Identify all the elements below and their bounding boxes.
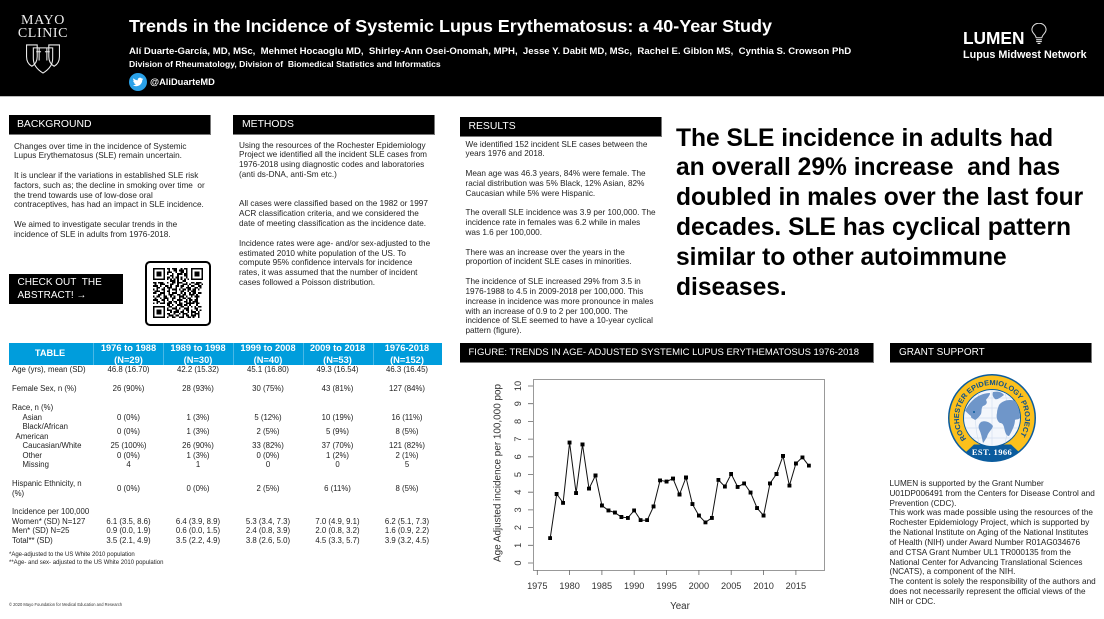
row: Black/African American — [16, 422, 418, 441]
x axis: 1985 — [592, 581, 612, 591]
x axis: 2015 — [786, 581, 806, 591]
results text: The incidence of SLE increased 29% from 3.5 in — [466, 277, 641, 286]
table footnotes: **Age- and sex- adjusted to the US White 2010 population — [9, 560, 163, 566]
header: 1999 to 2008 — [240, 343, 296, 365]
heading: results: RESULTS — [468, 121, 516, 132]
panel: results — [460, 117, 662, 335]
row: age: 46.3 (16.45) — [386, 365, 428, 374]
x axis: 1980 — [559, 581, 580, 591]
x axis: 2005 — [721, 581, 741, 591]
row: Hispanic ethnicity: Hispanic Ethnicity, n — [12, 479, 82, 488]
row: Caucasian/White: 26 (90%) — [182, 441, 214, 450]
y axis: 6 — [513, 454, 523, 459]
row: missing — [22, 460, 409, 469]
results text: incidence rate in females was 6.2 while in males — [466, 218, 640, 227]
header: 1989 to 1998: 1989 to 1998 — [170, 343, 226, 353]
logo wordmark — [18, 13, 68, 41]
background text: Changes over time in the incidence of Systemic — [14, 142, 186, 150]
row: Asian: 1 (3%) — [187, 413, 209, 422]
row: women: 7.0 (4.9, 9.1) — [315, 517, 360, 526]
row: men: 1.6 (0.9, 2.2) — [385, 526, 429, 535]
row: Black/African American: 0 (0%) — [117, 427, 140, 436]
row: other: 0 (0%) — [257, 451, 279, 460]
grant text: LUMEN is supported by the Grant Number — [890, 479, 1044, 488]
results text: pattern (figure). — [466, 326, 521, 335]
header: table: TABLE — [35, 348, 65, 358]
row: missing: 4 — [126, 460, 131, 469]
row: total: Total** (SD) — [12, 536, 53, 545]
row: age — [12, 365, 428, 374]
row: female sex: 26 (90%) — [113, 384, 144, 393]
table header — [9, 343, 442, 365]
grant text: the National Institute on Aging of the National Institutes — [890, 528, 1088, 537]
row: total: 3.8 (2.6, 5.0) — [246, 536, 290, 545]
background text: the trend towards use of low-dose oral — [14, 191, 153, 200]
row: Hispanic ethnicity: (%) — [12, 489, 24, 498]
grant text: The content is solely the responsibility of the authors and — [890, 577, 1096, 586]
globe — [963, 389, 1021, 447]
row: Caucasian/White: 33 (82%) — [252, 441, 284, 450]
row: other: 1 (3%) — [187, 451, 209, 460]
location dot — [973, 411, 975, 413]
LUMEN subtitle: Lupus Midwest Network — [963, 49, 1087, 61]
grant text: and CTSA Grant Number UL1 TR000135 from the — [890, 548, 1071, 557]
background text: factors, such as; the decline in smoking over time or — [14, 181, 205, 190]
heading: grant support: GRANT SUPPORT — [899, 347, 985, 358]
results text: was 1.6 per 100,000. — [466, 228, 542, 237]
row: women: 5.3 (3.4, 7.3) — [246, 517, 290, 526]
methods text: Incidence rates were age- and/or sex-adjusted to the — [239, 239, 430, 248]
panel: background — [9, 115, 211, 239]
row: missing: 5 — [405, 460, 409, 469]
row: Black/African American: 2 (5%) — [257, 427, 279, 436]
copyright: © 2020 Mayo Foundation for Medical Education and Research — [9, 602, 122, 607]
grant text: National Center for Advancing Translational Sciences — [890, 558, 1082, 567]
grant text: U01DP006491 from the Centers for Disease Control and — [890, 489, 1095, 498]
results text: with an increase of 0.9 to 2 per 100,000. The — [466, 307, 628, 316]
row: Asian: 5 (12%) — [254, 413, 282, 422]
row: other — [22, 451, 418, 460]
panel: table — [9, 343, 442, 545]
row: women — [12, 517, 429, 526]
row: other: 1 (2%) — [326, 451, 349, 460]
QR code — [145, 261, 211, 326]
row: Black/African American: American — [16, 432, 48, 441]
row: missing: 0 — [266, 460, 270, 469]
row: Asian: 16 (11%) — [391, 413, 423, 422]
y axis: 9 — [513, 401, 523, 406]
header: 1976-2018: (N=152) — [390, 355, 424, 365]
row: men: 0.9 (0.0, 1.9) — [106, 526, 151, 535]
icon: light bulb — [1031, 23, 1047, 44]
y axis: 2 — [513, 525, 523, 530]
heading: grant support — [890, 343, 1092, 363]
results text: Mean age was 46.3 years, 84% were female. The — [466, 169, 646, 178]
y axis title: Age Adjusted incidence per 100,000 pop — [492, 383, 504, 562]
methods text: ACR classification criteria, and we considered the — [239, 209, 419, 218]
x axis — [527, 570, 806, 591]
logo: Mayo Clinic — [18, 13, 68, 74]
row: men — [12, 526, 429, 535]
grant text — [890, 479, 1096, 606]
ring text path — [959, 385, 1025, 439]
grant text: of Health (NIH) under Award Number R01AG034676 — [890, 538, 1080, 547]
row: total: 3.9 (3.2, 4.5) — [385, 536, 429, 545]
header: 1976-2018 — [385, 343, 429, 365]
logo wordmark: MAYO — [21, 13, 65, 28]
icon: three shields — [26, 44, 60, 74]
table footnotes — [9, 552, 164, 566]
background text: It is unclear if the variations in established SLE risk — [14, 171, 198, 180]
key message — [676, 124, 1083, 301]
row: other: 0 (0%) — [117, 451, 140, 460]
row: men: 0.6 (0.0, 1.5) — [176, 526, 220, 535]
row: men: Men* (SD) N=25 — [12, 526, 69, 535]
row: missing: Missing — [22, 460, 49, 469]
globe grid — [964, 390, 1020, 446]
table footnotes: *Age-adjusted to the US White 2010 population — [9, 552, 135, 558]
row: Caucasian/White: 25 (100%) — [111, 441, 146, 450]
results text: years 1976 and 2018. — [466, 149, 545, 158]
y axis: 1 — [513, 543, 523, 548]
row: men: 2.0 (0.8, 3.2) — [315, 526, 360, 535]
results text: Caucasian while 5% were Hispanic. — [466, 189, 595, 198]
grant text: Rochester Epidemiology Project, which is supported by — [890, 518, 1089, 527]
background text — [14, 142, 205, 239]
row: total — [12, 536, 429, 545]
row: age: 42.2 (15.32) — [177, 365, 219, 374]
header: 1999 to 2008: 1999 to 2008 — [240, 343, 296, 353]
methods text: cases followed a Poisson distribution. — [239, 278, 375, 287]
row: Black/African American: 5 (9%) — [326, 427, 349, 436]
plot frame — [534, 380, 824, 570]
row: Black/African American: 1 (3%) — [187, 427, 209, 436]
row: age: 46.8 (16.70) — [107, 365, 150, 374]
panel: methods — [233, 115, 435, 287]
row: Asian: 0 (0%) — [117, 413, 140, 422]
x axis: 2000 — [689, 581, 709, 591]
heading: methods — [233, 115, 435, 135]
header: 1989 to 1998: (N=30) — [184, 355, 212, 365]
methods text: date of meeting classification as the incidence date. — [239, 219, 426, 228]
row: age: 45.1 (16.80) — [247, 365, 289, 374]
row: female sex: Female Sex, n (%) — [12, 384, 77, 393]
methods text: Using the resources of the Rochester Epidemiology — [239, 140, 426, 150]
methods text: All cases were classified based on the 1982 or 1997 — [239, 199, 428, 208]
row: age: 49.3 (16.54) — [316, 365, 359, 374]
ring — [948, 374, 1036, 462]
row: Hispanic ethnicity: 0 (0%) — [187, 484, 209, 493]
twitter handle: @AliDuarteMD — [150, 77, 215, 87]
grant text: does not necessarily represent the official views of the — [890, 587, 1086, 596]
row: men: 2.4 (0.8, 3.9) — [246, 526, 290, 535]
results text: There was an increase over the years in the — [466, 248, 625, 257]
grant text: (NCATS), a component of the NIH. — [890, 567, 1015, 576]
row: female sex: 43 (81%) — [322, 384, 353, 393]
y axis: 3 — [513, 507, 523, 512]
methods text: Project we identified all the incident SLE cases from — [239, 150, 427, 159]
title: Trends in the Incidence of Systemic Lupus Erythematosus: a 40-Year Study — [129, 16, 772, 36]
key message: decades. SLE has cyclical pattern — [676, 214, 1071, 241]
heading: background — [9, 115, 211, 135]
line chart — [492, 379, 825, 612]
header: 2009 to 2018: (N=53) — [323, 355, 352, 365]
header band — [0, 0, 1104, 97]
y axis: 10 — [513, 381, 523, 391]
heading: results — [460, 117, 662, 137]
header: 1976-2018: 1976-2018 — [385, 343, 429, 353]
x axis: 1990 — [624, 581, 644, 591]
logo: LUMEN — [963, 23, 1087, 61]
authors: Alí Duarte-García, MD, MSc, Mehmet Hocaoglu MD, Shirley-Ann Osei-Onomah, MPH, Jesse Y. Dabit MD, MSc, Rachel E. Giblon MS, Cynthia S. Crowson PhD — [129, 46, 851, 57]
results text — [466, 140, 656, 335]
row: Hispanic ethnicity: 6 (11%) — [324, 484, 351, 493]
row: total: 4.5 (3.3, 5.7) — [315, 536, 360, 545]
logo: Rochester Epidemiology Project — [948, 374, 1036, 462]
established year: EST. 1966 — [972, 447, 1012, 457]
row: Asian: 10 (19%) — [322, 413, 353, 422]
methods text: 1976-2018 using diagnostic codes and laboratories — [239, 160, 424, 169]
row: female sex: 127 (84%) — [389, 384, 425, 393]
row: Caucasian/White: 37 (70%) — [322, 441, 353, 450]
ring text: ROCHESTER EPIDEMIOLOGY PROJECT — [954, 380, 1030, 442]
x axis: 2010 — [753, 581, 774, 591]
results text: 1976-1988 to 4.5 in 2009-2018 per 100,000. This — [466, 287, 643, 296]
header: 1976 to 1988: (N=29) — [114, 355, 143, 365]
methods text: compute 95% confidence intervals for incidence — [239, 258, 412, 267]
row: female sex: 28 (93%) — [182, 384, 214, 393]
callout: check out the abstract: ABSTRACT! → — [18, 290, 86, 300]
icon: twitter — [129, 73, 147, 91]
results text: increase in incidence was more pronounce in males — [466, 297, 653, 306]
row: total: 3.5 (2.1, 4.9) — [106, 536, 151, 545]
y axis: 8 — [513, 419, 523, 424]
row: Black/African American: Black/African — [22, 422, 68, 431]
background text: contraceptives, has had an impact in SLE incidence. — [14, 200, 204, 209]
background text: We aimed to investigate secular trends in the — [14, 220, 177, 229]
x axis: 1995 — [656, 581, 677, 591]
affiliations: Division of Rheumatology, Division of Biomedical Statistics and Informatics — [129, 59, 441, 69]
row: female sex — [12, 384, 425, 393]
row: Caucasian/White: Caucasian/White — [22, 441, 81, 450]
row: missing: 1 — [196, 460, 200, 469]
grant text: NIH or CDC. — [890, 597, 935, 606]
continents — [965, 392, 1020, 443]
row: Hispanic ethnicity: 2 (5%) — [257, 484, 279, 493]
key message: The SLE incidence in adults had — [676, 124, 1053, 152]
row: women: 6.1 (3.5, 8.6) — [106, 517, 151, 526]
callout: check out the abstract — [9, 274, 123, 304]
key message: an overall 29% increase and has — [676, 154, 1060, 181]
methods text — [239, 140, 430, 287]
row: total: 3.5 (2.2, 4.9) — [176, 536, 220, 545]
row: Black/African American: 8 (5%) — [396, 427, 418, 436]
header: 1976 to 1988: 1976 to 1988 — [101, 343, 156, 353]
y axis — [513, 381, 533, 566]
callout: check out the abstract: CHECK OUT THE — [18, 277, 102, 288]
row: Asian — [22, 413, 423, 422]
heading: figure: FIGURE: TRENDS IN AGE- ADJUSTED SYSTEMIC LUPUS ERYTHEMATOSUS 1976-2018 — [468, 347, 859, 358]
LUMEN wordmark: LUMEN — [963, 28, 1024, 48]
header: 2009 to 2018: 2009 to 2018 — [310, 343, 365, 353]
key message: similar to other autoimmune — [676, 244, 1007, 271]
header background — [9, 343, 442, 365]
y axis: 4 — [513, 490, 523, 495]
header dividers — [93, 343, 374, 365]
grant text: Prevention (CDC). — [890, 499, 956, 508]
incidence series — [550, 443, 809, 538]
key message: doubled in males over the last four — [676, 184, 1083, 211]
row: Caucasian/White — [22, 441, 425, 450]
bottom band — [966, 444, 1019, 461]
row: Hispanic ethnicity — [12, 479, 418, 498]
results text: racial distribution was 5% Black, 12% Asian, 82% — [466, 179, 644, 188]
x axis title: Year — [670, 601, 691, 612]
heading: methods: METHODS — [242, 119, 294, 130]
results text: The overall SLE incidence was 3.9 per 100,000. The — [466, 208, 656, 217]
row: women: 6.4 (3.9, 8.9) — [176, 517, 220, 526]
y axis: 5 — [513, 472, 523, 477]
row: Asian: Asian — [22, 413, 42, 422]
methods text: estimated 2010 white population of the US. To — [239, 249, 406, 258]
x axis: 1975 — [527, 581, 548, 591]
results text: incidence of SLE seemed to have a 10-year cyclical — [466, 316, 653, 325]
methods text: rates, it was assumed that the number of incident — [239, 268, 417, 277]
row: missing: 0 — [335, 460, 340, 469]
methods text: (anti ds-DNA, anti-Sm etc.) — [239, 170, 337, 179]
row: incidence heading: Incidence per 100,000 — [12, 507, 89, 516]
row: race heading: Race, n (%) — [12, 403, 53, 412]
header: 1999 to 2008: (N=40) — [254, 355, 282, 365]
row: other: 2 (1%) — [396, 451, 418, 460]
heading: figure — [460, 343, 874, 363]
grant text: This work was made possible using the resources of the — [890, 508, 1093, 517]
row: Caucasian/White: 121 (82%) — [389, 441, 425, 450]
row: Hispanic ethnicity: 0 (0%) — [117, 484, 140, 493]
row: other: Other — [22, 451, 42, 460]
header: 1989 to 1998 — [170, 343, 226, 365]
results text: We identified 152 incident SLE cases between the — [466, 140, 647, 148]
row: women: 6.2 (5.1, 7.3) — [385, 517, 429, 526]
heading: background: BACKGROUND — [17, 119, 91, 130]
y axis: 0 — [513, 560, 523, 566]
key message: diseases. — [676, 274, 787, 301]
row: female sex: 30 (75%) — [252, 384, 284, 393]
row: women: Women* (SD) N=127 — [12, 517, 85, 526]
header: 2009 to 2018 — [310, 343, 365, 365]
row: Hispanic ethnicity: 8 (5%) — [396, 484, 418, 493]
row: age: Age (yrs), mean (SD) — [12, 365, 86, 374]
y axis: 7 — [513, 437, 523, 442]
results text: proportion of incident SLE cases in minorities. — [466, 257, 632, 266]
header: 1976 to 1988 — [101, 343, 156, 365]
logo wordmark: CLINIC — [18, 26, 68, 41]
background text: Lupus Erythematosus (SLE) remain uncertain. — [14, 151, 182, 160]
background text: incidence of SLE in adults from 1976-2018. — [14, 230, 171, 239]
